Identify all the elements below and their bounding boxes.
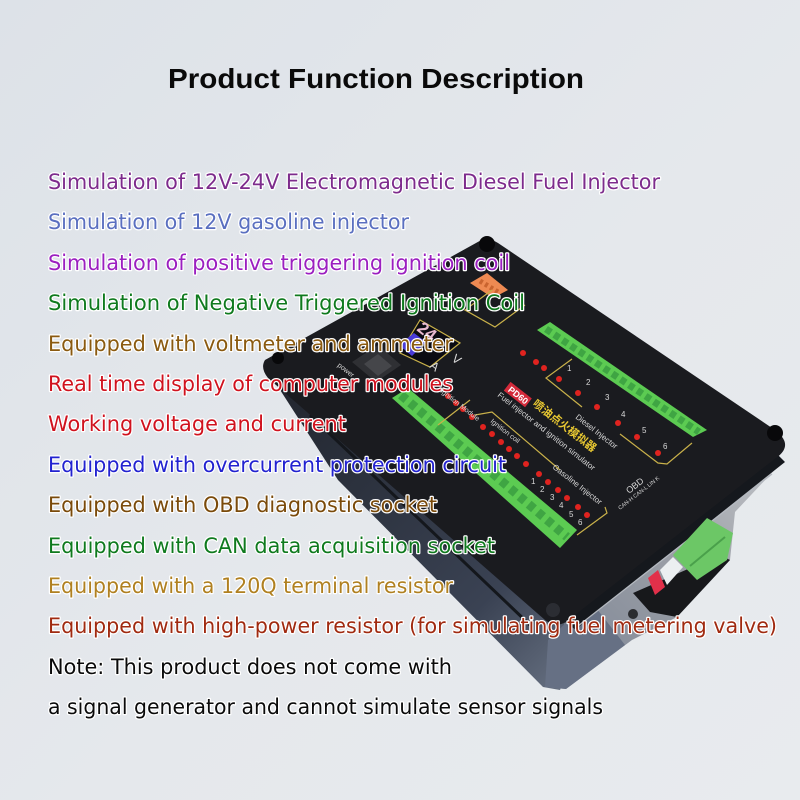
terminal position numbers: 3: [605, 393, 610, 402]
feature: real time display: Real time display of computer modules: [48, 372, 453, 396]
PD60 model tag and product name: PD60: [506, 385, 530, 406]
note line 2: a signal generator and cannot simulate sensor signals: [48, 695, 603, 719]
terminal position numbers: 3: [550, 493, 555, 502]
feature: CAN socket: Equipped with CAN data acquisition socket: [48, 534, 495, 558]
power switch: power: [336, 362, 356, 380]
terminal position numbers: 2: [586, 378, 591, 387]
feature: diesel injector: Simulation of 12V-24V Electromagnetic Diesel Fuel Injector: [48, 170, 660, 194]
power switch: [336, 345, 401, 382]
injector section labels: Gasoline Injector: [551, 462, 604, 507]
feature: OBD socket: Equipped with OBD diagnostic socket: [48, 493, 437, 517]
injector section labels: [439, 388, 620, 507]
terminal position numbers: 4: [621, 410, 626, 419]
injector section labels: Ignition coil: [489, 418, 521, 445]
upper green terminal block: [537, 322, 707, 437]
terminal position numbers: 4: [559, 501, 564, 510]
voltmeter and ammeter display: 24: [414, 318, 441, 345]
voltmeter and ammeter display: V: [449, 351, 464, 367]
feature: terminal resistor: Equipped with a 120Q terminal resistor: [48, 574, 453, 598]
orange connector: [470, 273, 508, 298]
terminal position numbers: 6: [663, 442, 668, 451]
feature: voltmeter and ammeter: Equipped with voltmeter and ammeter: [48, 332, 453, 356]
device side walls: [266, 368, 785, 690]
feature: negative ignition coil: Simulation of Negative Triggered Ignition Coil: [48, 291, 525, 315]
injector section labels: Diesel Injector: [574, 412, 620, 451]
yellow outlined panel regions: [438, 290, 692, 535]
rear connectors: OBD, CAN and resistor sockets: [628, 518, 733, 619]
OBD label: CAN-H CAN-L LIN K: [618, 476, 661, 512]
terminal position numbers: 5: [569, 510, 574, 519]
injector section labels: Ignition Module: [439, 388, 481, 423]
red indicator LEDs: [445, 350, 661, 518]
PD60 model tag and product name: Fuel injector and ignition simulator: [496, 390, 597, 473]
title: Product Function Description: [168, 63, 584, 94]
feature: high-power resistor: Equipped with high-power resistor (for simulating fuel metering valve): [48, 614, 777, 638]
voltmeter and ammeter display: [399, 318, 464, 374]
OBD label: OBD: [624, 475, 646, 496]
terminal position numbers: 5: [642, 426, 647, 435]
feature: positive ignition coil: Simulation of positive triggering ignition coil: [48, 251, 510, 275]
feature: overcurrent protection: Equipped with overcurrent protection circuit: [48, 453, 506, 477]
voltmeter and ammeter display: A: [427, 358, 442, 374]
note line 1: Note: This product does not come with: [48, 655, 452, 679]
corner screws: [272, 236, 783, 617]
lower green terminal block: [392, 388, 577, 548]
device lid: [263, 240, 785, 625]
feature: working voltage and current: Working voltage and current: [48, 412, 346, 436]
terminal position numbers: 1: [567, 364, 572, 373]
terminal position numbers: [531, 364, 668, 527]
feature: gasoline injector: Simulation of 12V gasoline injector: [48, 210, 409, 234]
product: simulator device: [263, 236, 785, 690]
terminal position numbers: 1: [531, 477, 536, 486]
terminal position numbers: 2: [540, 485, 545, 494]
PD60 model tag and product name: 喷油点火模拟器: [530, 396, 599, 455]
terminal position numbers: 6: [578, 518, 583, 527]
feature list: [48, 170, 777, 719]
